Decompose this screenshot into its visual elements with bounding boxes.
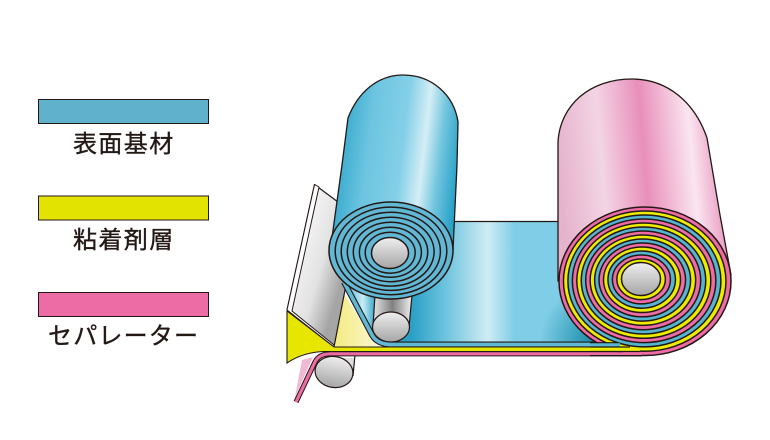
lower roller <box>313 353 355 391</box>
diagram: laminating rollers <box>287 75 731 402</box>
guide plate <box>287 184 345 347</box>
pink roll body <box>558 79 731 300</box>
blue film strip around roller <box>344 282 620 344</box>
blue roll body <box>331 75 458 250</box>
legend: separator: セパレーター <box>48 323 199 350</box>
pale pink separator backing <box>295 357 313 397</box>
blue roll core <box>372 238 408 268</box>
legend: separator <box>38 292 208 350</box>
pink roll core <box>622 262 660 296</box>
legend: adhesive layer: 粘着剤層 <box>73 227 175 254</box>
legend: surface base material <box>38 100 208 158</box>
upper roller <box>372 295 412 342</box>
pink roll end rings <box>559 207 731 356</box>
pink separator strip <box>296 354 642 402</box>
blue roll end rings <box>329 202 453 299</box>
legend: surface base material: 表面基材 <box>73 131 175 158</box>
blue film sheet <box>345 221 630 344</box>
yellow adhesive wedge and strip <box>287 311 642 363</box>
strip ends over pink roll <box>590 343 642 356</box>
legend: adhesive layer <box>38 196 208 254</box>
pale yellow adhesive <box>335 290 382 347</box>
